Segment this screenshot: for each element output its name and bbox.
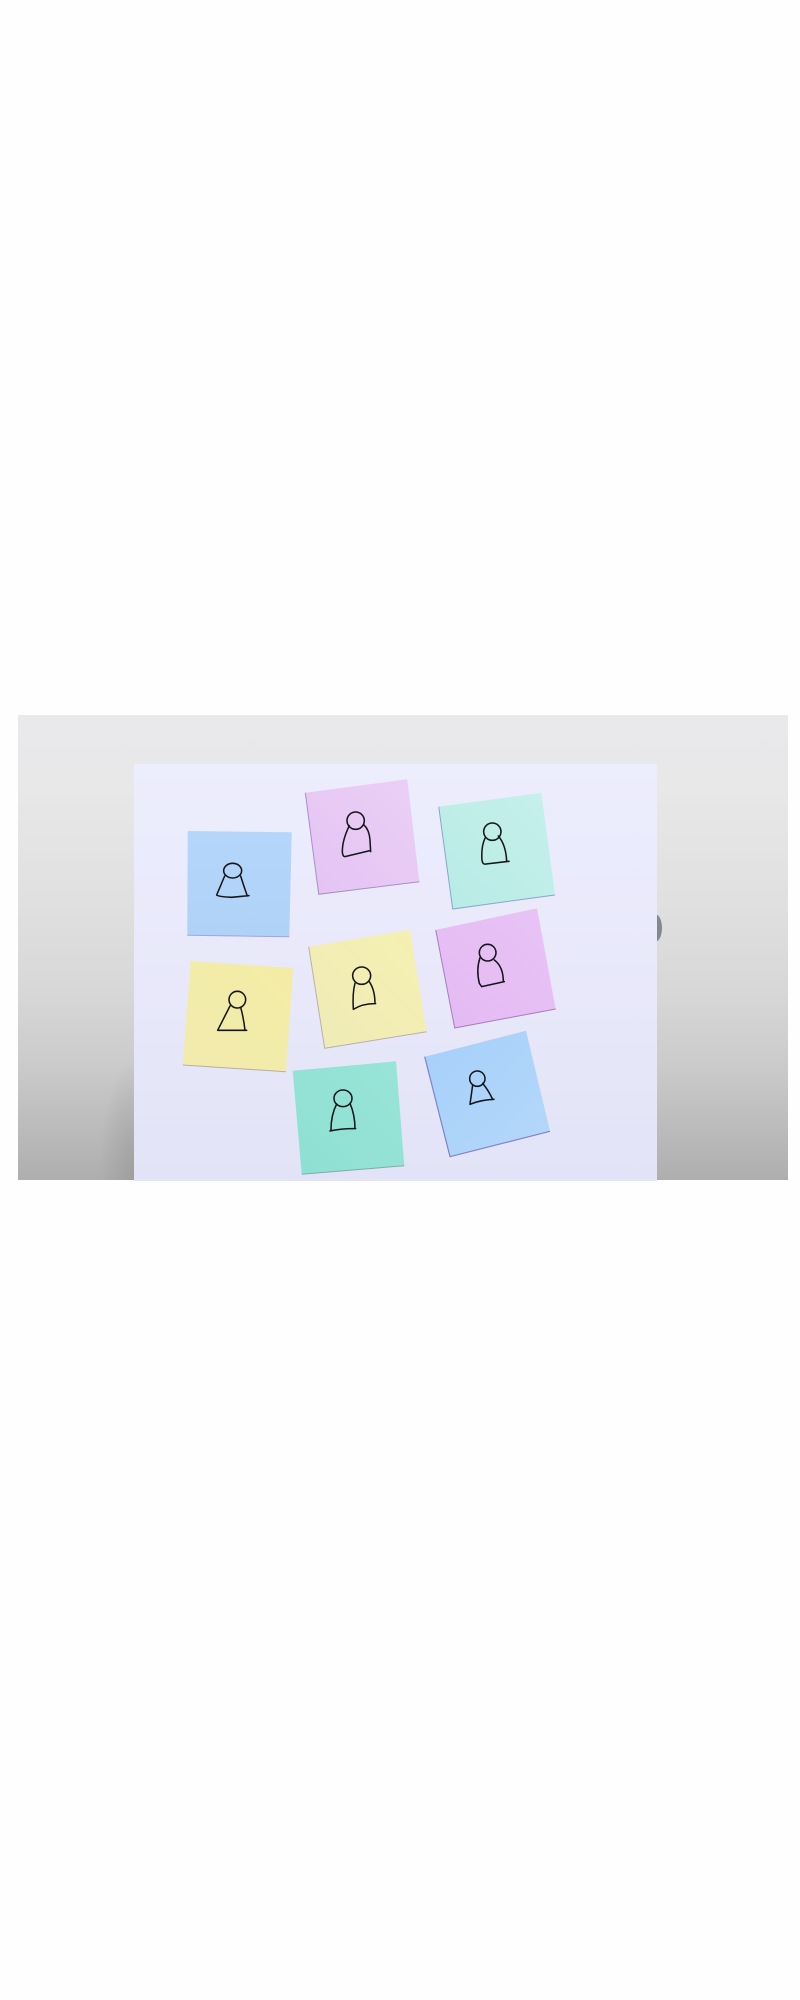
dark round object behind paper (648, 914, 662, 942)
person drawing (218, 991, 247, 1030)
note: blue bottom right (425, 1031, 550, 1157)
person drawing (330, 1090, 356, 1131)
person drawing (482, 823, 509, 864)
note: purple top center (305, 779, 419, 894)
person drawing (342, 812, 371, 857)
person drawing (478, 944, 504, 987)
person drawing (470, 1071, 494, 1104)
note: purple right (436, 908, 556, 1028)
note: yellow left (183, 961, 293, 1072)
note: cyan top right (439, 793, 555, 909)
photo: wall background (18, 715, 788, 1180)
note: blue top left (187, 831, 292, 937)
note: teal bottom (293, 1061, 404, 1174)
paper sheet (134, 764, 657, 1181)
person drawing (217, 863, 249, 897)
note: yellow center (309, 930, 427, 1048)
person drawing (353, 967, 376, 1009)
wall shadow beside paper (98, 1060, 134, 1180)
